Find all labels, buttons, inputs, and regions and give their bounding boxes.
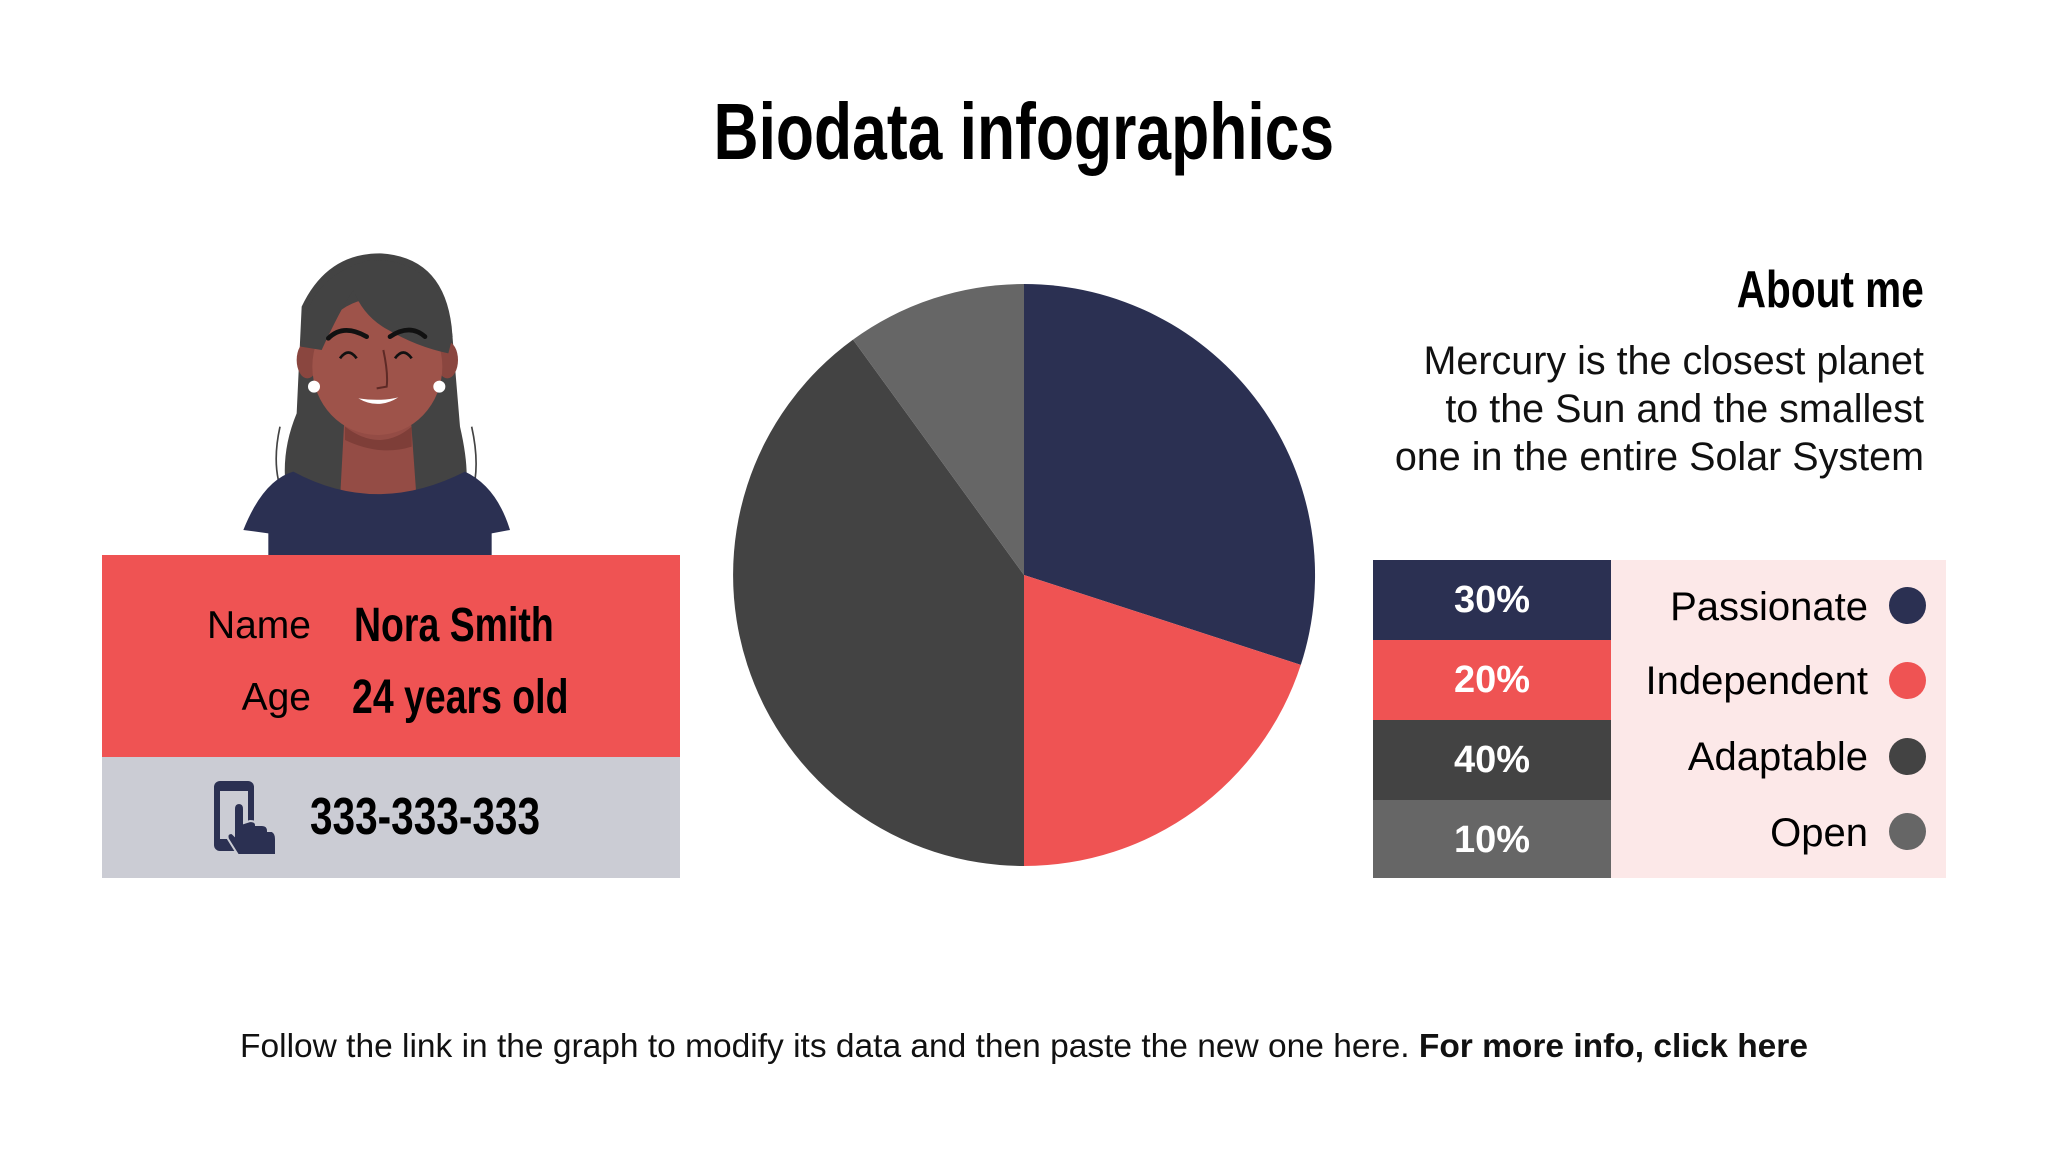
table: percentages legend <box>1373 560 1946 878</box>
pie chart <box>733 284 1316 866</box>
label: name: Name <box>207 604 311 647</box>
text: phone number: 333-333-333 <box>310 788 540 846</box>
text: about me description: Mercury is the closest planet <box>1423 339 1924 383</box>
row: adaptable: Adaptable <box>1688 735 1868 779</box>
row: passionate: 30% <box>1454 579 1530 621</box>
heading: about me: About me <box>1737 261 1924 319</box>
row: adaptable: 40% <box>1454 739 1530 781</box>
text: about me description: to the Sun and the smallest <box>1445 387 1924 431</box>
row: adaptable <box>1373 720 1926 800</box>
row: open: 10% <box>1454 819 1530 861</box>
row: independent: Independent <box>1646 659 1868 703</box>
row: passionate <box>1373 560 1926 640</box>
illustration: woman <box>243 253 510 555</box>
row: open <box>1373 800 1926 878</box>
value: age: 24 years old <box>352 671 568 724</box>
icon: phone touch <box>214 781 275 854</box>
row: open: Open <box>1770 811 1868 855</box>
panel: name card <box>102 555 680 757</box>
row: passionate: Passionate <box>1670 585 1868 629</box>
label: age: Age <box>242 676 311 719</box>
text: about me description <box>1395 339 1924 479</box>
row: independent <box>1373 640 1926 720</box>
row: independent: 20% <box>1454 659 1530 701</box>
title: Biodata infographics <box>714 87 1334 176</box>
panel: phone <box>102 757 680 878</box>
text: about me description: one in the entire Solar System <box>1395 435 1924 479</box>
value: name: Nora Smith <box>354 599 554 652</box>
footer note: Follow the link in the graph to modify its data and then paste the new one here. For more info, click here <box>240 1028 1808 1065</box>
